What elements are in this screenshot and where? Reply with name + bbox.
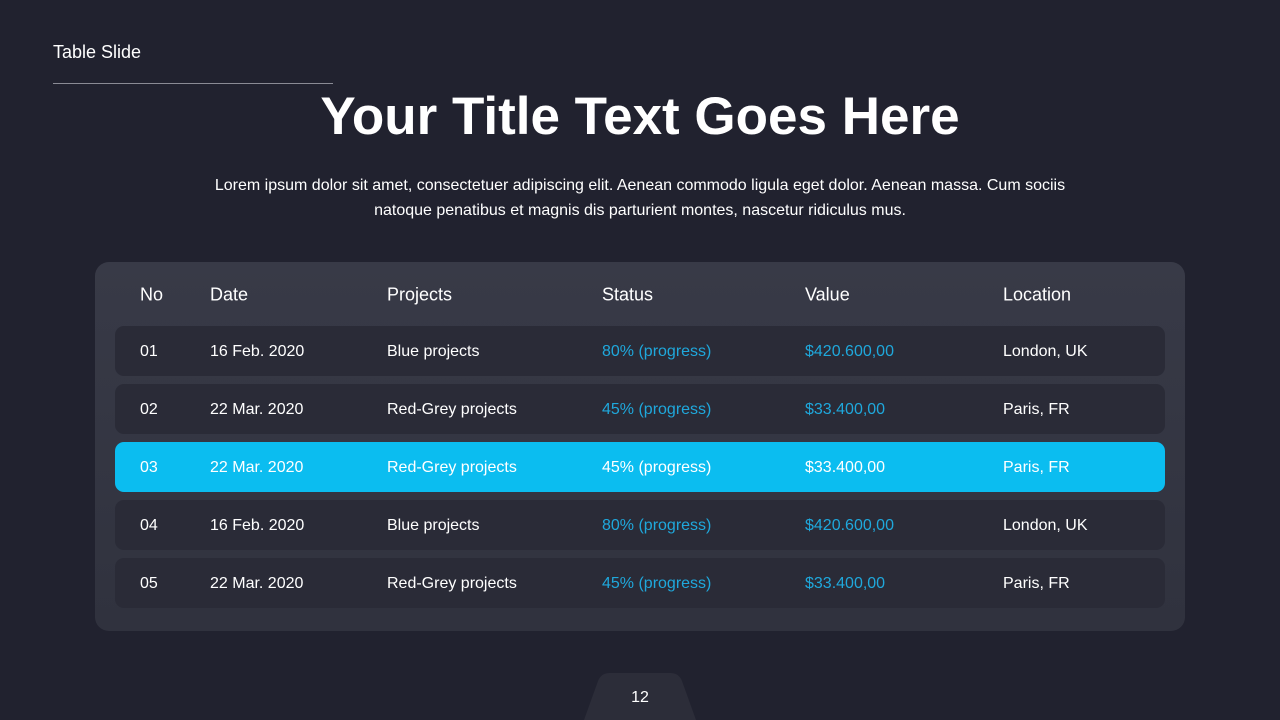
subtitle text: Lorem ipsum dolor sit amet, consectetuer adipiscing elit. Aenean commodo ligula eget dolor. Aenean massa. Cum sociis natoque penatibus et magnis dis parturient montes, nascetur ridiculus mus. bbox=[215, 177, 1065, 219]
table header: No bbox=[140, 284, 163, 304]
row 03 highlighted: Red-Grey projects bbox=[387, 459, 517, 476]
row 01: Blue projects bbox=[387, 343, 480, 360]
row 03 highlighted: 45% (progress) bbox=[602, 459, 711, 476]
row 01: 80% (progress) bbox=[602, 343, 711, 360]
row 01: $420.600,00 bbox=[805, 343, 894, 360]
row 03 highlighted: $33.400,00 bbox=[805, 459, 885, 476]
row 05 bbox=[115, 558, 1165, 608]
table header: Status bbox=[602, 284, 653, 304]
row 03 highlighted: Paris, FR bbox=[1003, 459, 1070, 476]
row 01 bbox=[115, 326, 1165, 376]
row 03 highlighted: 22 Mar. 2020 bbox=[210, 459, 303, 476]
row 02: $33.400,00 bbox=[805, 401, 885, 418]
row 02 bbox=[115, 384, 1165, 434]
row 04 bbox=[115, 500, 1165, 550]
row 01: London, UK bbox=[1003, 343, 1088, 360]
panel: table bbox=[95, 262, 1185, 631]
table header bbox=[140, 284, 1071, 304]
page number tab: 12 bbox=[631, 689, 649, 706]
row 04: 04 bbox=[140, 517, 158, 534]
row 05: 05 bbox=[140, 575, 158, 592]
row 02: 45% (progress) bbox=[602, 401, 711, 418]
row 02: 22 Mar. 2020 bbox=[210, 401, 303, 418]
row 05: 45% (progress) bbox=[602, 575, 711, 592]
row 04: 16 Feb. 2020 bbox=[210, 517, 304, 534]
row 03 highlighted bbox=[115, 442, 1165, 492]
title: Your Title Text Goes Here bbox=[320, 87, 960, 146]
table header: Date bbox=[210, 284, 248, 304]
table header: Value bbox=[805, 284, 850, 304]
label: table slide: Table Slide bbox=[53, 42, 141, 62]
row 05: 22 Mar. 2020 bbox=[210, 575, 303, 592]
row 02: 02 bbox=[140, 401, 158, 418]
row 03 highlighted: 03 bbox=[140, 459, 158, 476]
row 01: 16 Feb. 2020 bbox=[210, 343, 304, 360]
row 04: $420.600,00 bbox=[805, 517, 894, 534]
row 05: Paris, FR bbox=[1003, 575, 1070, 592]
row 04: Blue projects bbox=[387, 517, 480, 534]
row 04: London, UK bbox=[1003, 517, 1088, 534]
table header: Projects bbox=[387, 284, 452, 304]
row 04: 80% (progress) bbox=[602, 517, 711, 534]
table header: Location bbox=[1003, 284, 1071, 304]
row 02: Paris, FR bbox=[1003, 401, 1070, 418]
row 02: Red-Grey projects bbox=[387, 401, 517, 418]
page number tab bbox=[584, 673, 696, 720]
row 05: $33.400,00 bbox=[805, 575, 885, 592]
row 05: Red-Grey projects bbox=[387, 575, 517, 592]
row 01: 01 bbox=[140, 343, 158, 360]
